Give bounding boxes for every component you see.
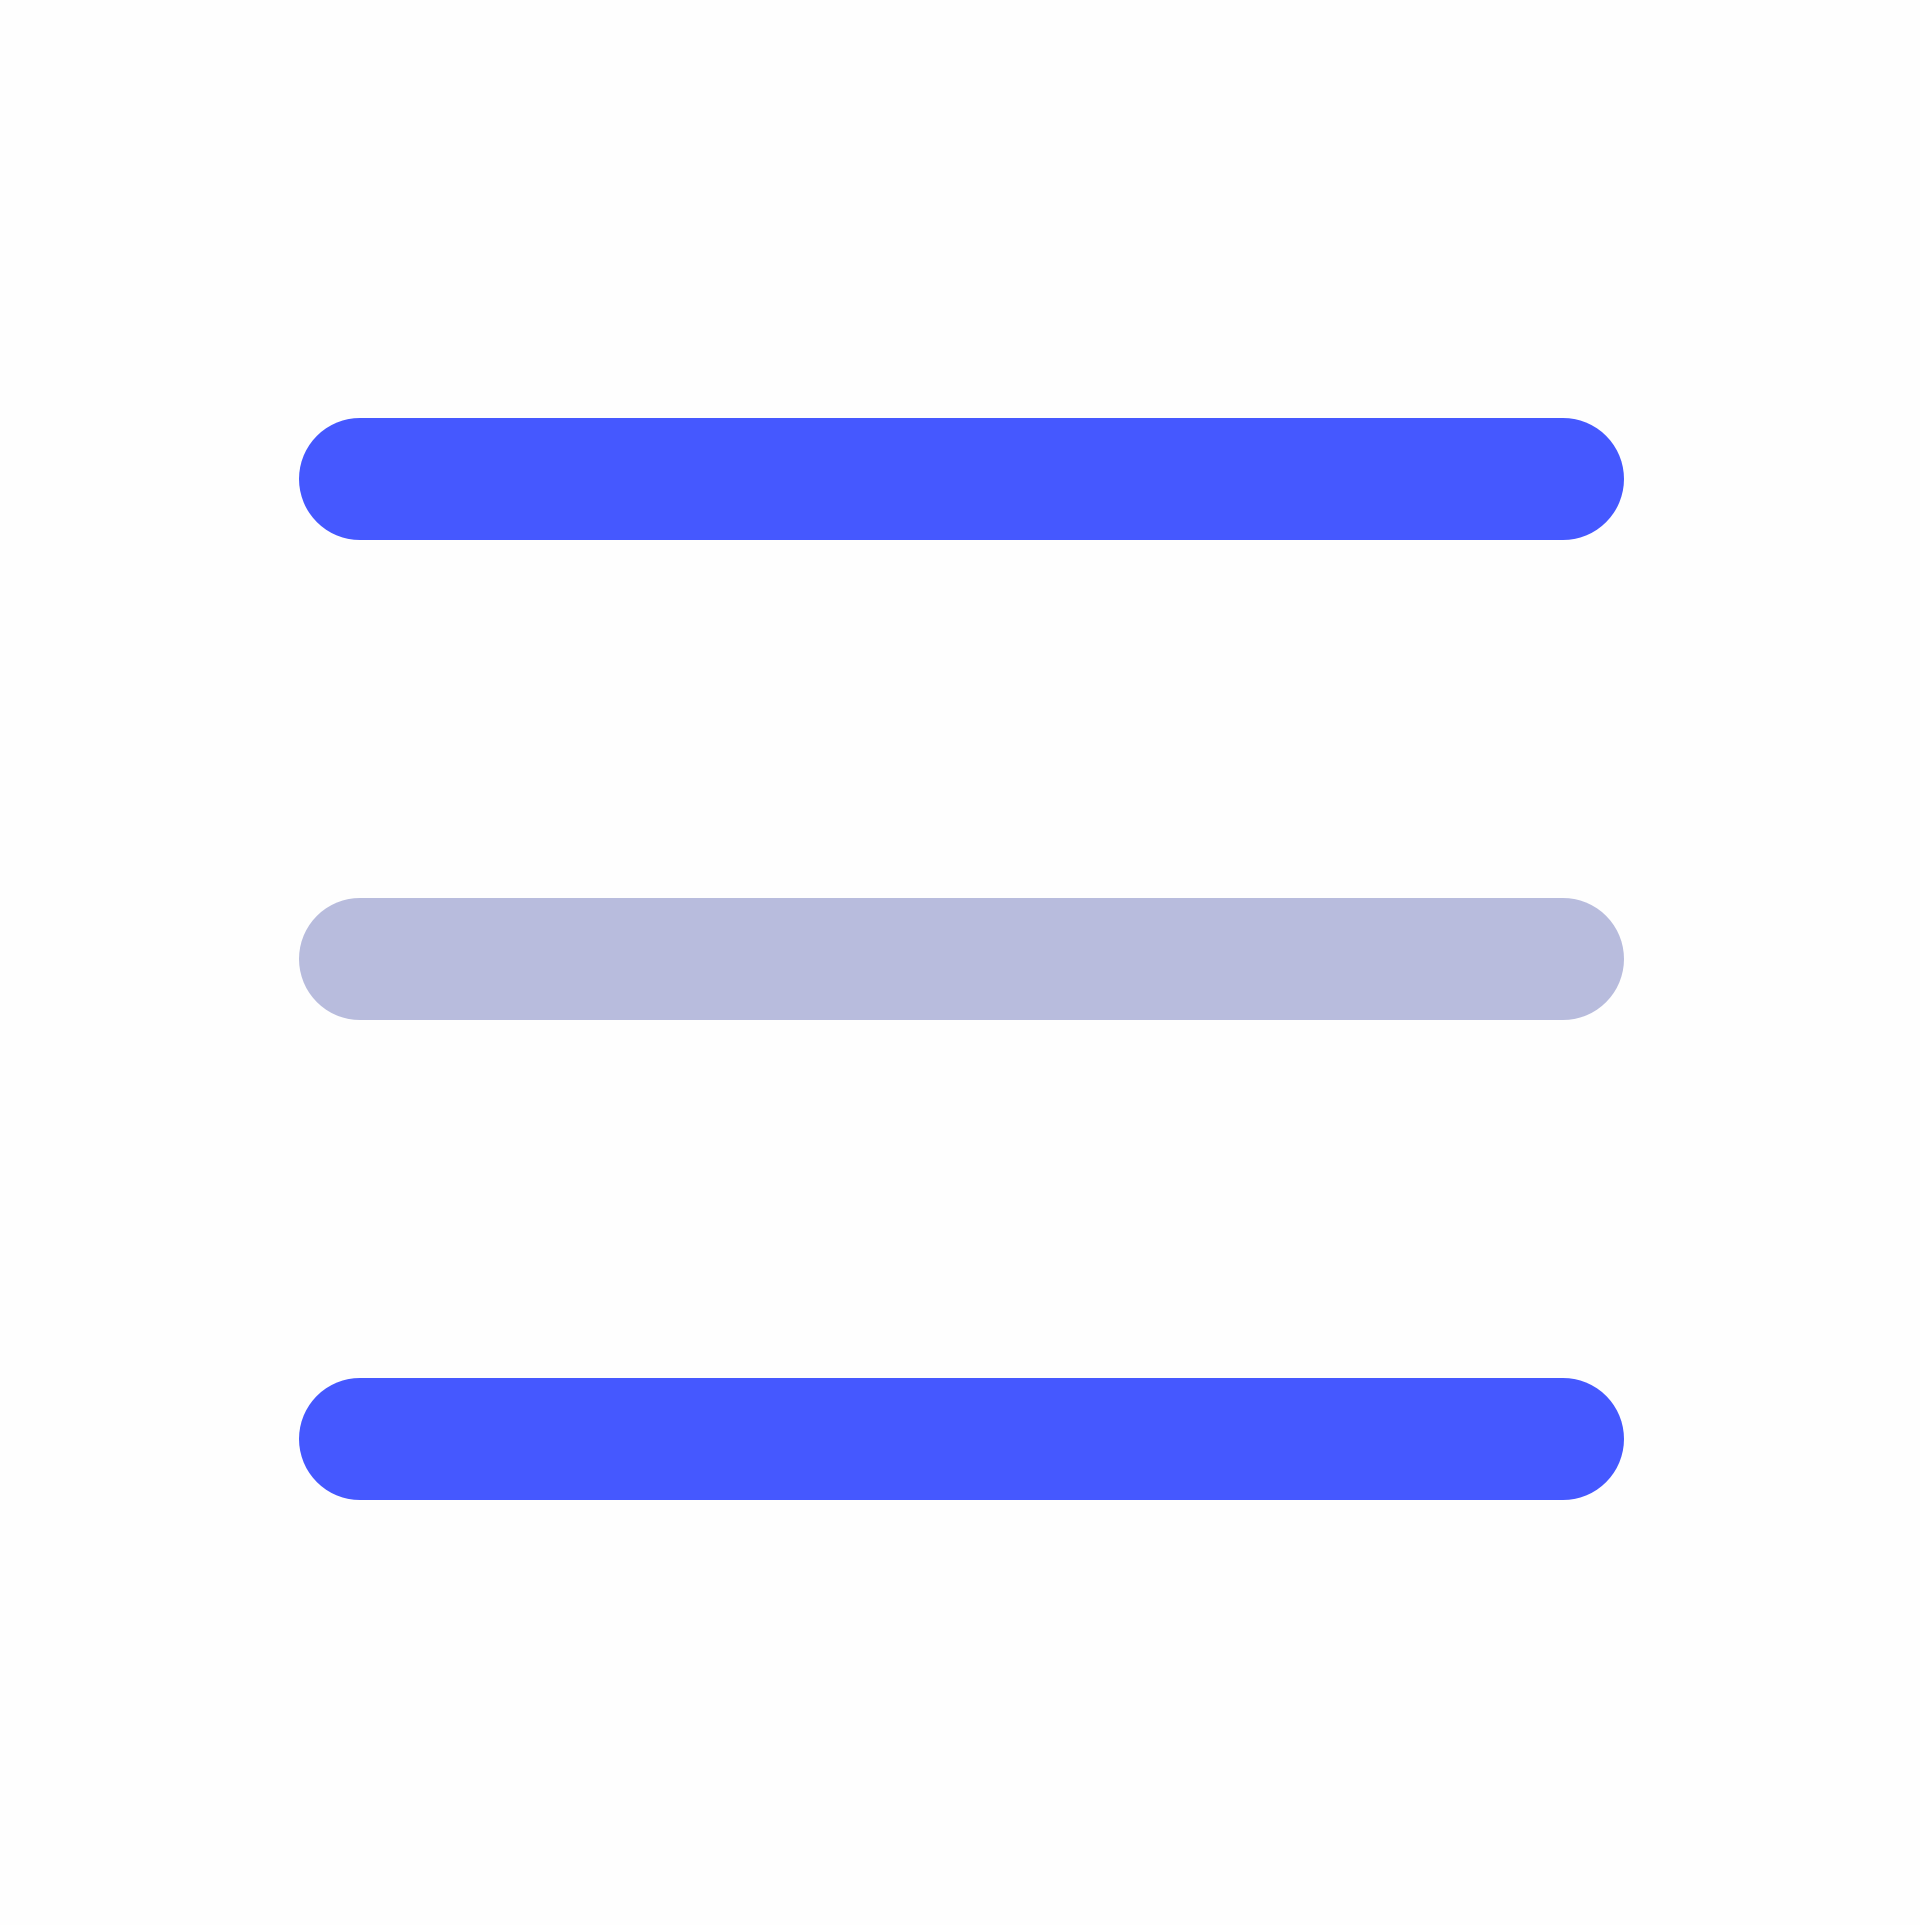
bar: bottom	[299, 1378, 1624, 1500]
bar: middle	[299, 898, 1624, 1020]
bar: top	[299, 418, 1624, 540]
